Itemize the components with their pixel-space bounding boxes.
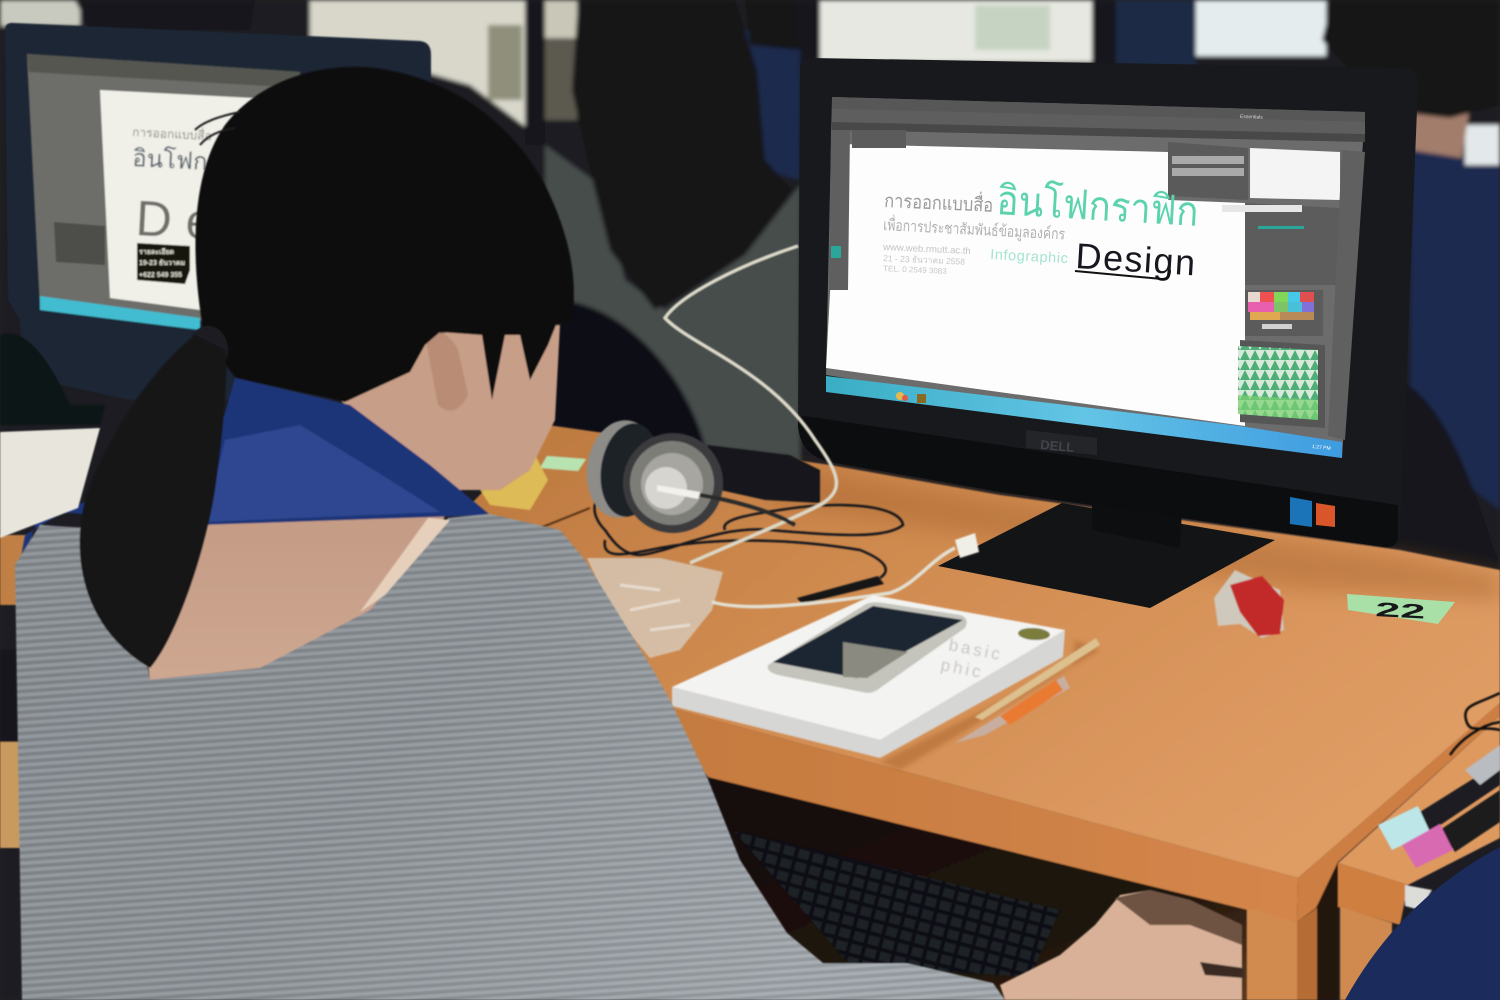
- dell logo: [1026, 430, 1097, 455]
- markers and cable right: [1378, 693, 1500, 868]
- left monitor: [0, 23, 431, 425]
- stray hairs: [195, 112, 240, 145]
- left desk lower: [0, 742, 35, 848]
- second desk top: [1338, 716, 1500, 885]
- left monitor black label: 19-23 ธันวาคม: [139, 259, 185, 267]
- sweater: [15, 514, 1005, 1000]
- intel sticker: [1290, 497, 1312, 527]
- orange sticker: [1316, 503, 1335, 527]
- bra strap: [360, 518, 450, 612]
- book and phone: [672, 595, 1100, 770]
- monitor screen: [826, 97, 1365, 458]
- book title: basic: [947, 635, 1005, 664]
- background screen sliver: [545, 0, 577, 38]
- menu bar: [832, 97, 1365, 122]
- background person top left: [75, 0, 255, 30]
- plastic bag: [587, 558, 723, 658]
- under desk shadow: [708, 777, 1247, 1000]
- headphone plug: [657, 485, 795, 525]
- details line 3: TEL. 0 2549 3083: [883, 264, 947, 276]
- second desk front: [1338, 863, 1408, 925]
- tool colour swatch: [831, 246, 841, 258]
- main monitor: [798, 58, 1418, 608]
- white usb cable: [712, 548, 955, 607]
- monitor post: [1092, 0, 1116, 66]
- label 22: 22: [1375, 599, 1426, 624]
- colour panel: [1245, 203, 1340, 285]
- desk: [0, 425, 1500, 1000]
- centre person sweater: [545, 145, 800, 470]
- essentials label: Essentials: [1240, 114, 1263, 121]
- tooltip: [1222, 205, 1302, 212]
- dell logo: DELL: [1040, 437, 1075, 455]
- taskbar icons: [896, 392, 926, 403]
- monitor body: [798, 58, 1418, 547]
- label 21 on desk: [540, 456, 586, 471]
- phone screen: [773, 606, 963, 678]
- background person navy: [1116, 0, 1196, 66]
- marker silver cap: [1465, 745, 1500, 785]
- background screen top right A: [820, 0, 1092, 62]
- infographic word: Infographic: [990, 247, 1069, 267]
- design underline: [1075, 270, 1170, 279]
- second desk leg: [1340, 907, 1392, 1000]
- gap top right: [800, 0, 820, 70]
- pencil: [975, 638, 1100, 720]
- details line 1: www.web.rmutt.ac.th: [882, 242, 971, 257]
- black cable right: [1450, 693, 1500, 755]
- left monitor text 1: การออกแบบสื่อ: [132, 123, 212, 143]
- navigator panel: [1250, 148, 1340, 200]
- thai title green: อินโฟกราฟิก: [995, 177, 1200, 235]
- book shadow: [880, 640, 1100, 770]
- left monitor canvas: [100, 90, 290, 322]
- headband: [707, 445, 820, 503]
- right person neck: [1405, 105, 1470, 158]
- navy shirt of centre person: [745, 30, 800, 180]
- right person hair: [1322, 0, 1500, 118]
- background screen colour column: [488, 25, 522, 100]
- silver ear cup: [623, 433, 723, 533]
- stand base: [938, 503, 1275, 608]
- thai title: การออกแบบสื่อ: [884, 187, 994, 217]
- left monitor taskbar: [40, 296, 200, 330]
- yellow wrapper: [480, 445, 548, 510]
- left monitor small panel: [54, 222, 105, 265]
- dark gap between desks: [1297, 862, 1338, 1000]
- second desk white tag: [1405, 885, 1432, 910]
- desk shadow under monitor: [760, 470, 1500, 600]
- centre person dark hair behind: [745, 0, 798, 50]
- hand: [1000, 890, 1243, 1000]
- left monitor body: [5, 23, 431, 400]
- left keyboard: [0, 650, 28, 742]
- left monitor text 2: อินโฟก: [132, 144, 208, 176]
- colour bridge greens: [1238, 346, 1318, 420]
- left book: [0, 428, 100, 538]
- background screen centre left: [310, 0, 527, 128]
- background screen top right B: [1196, 0, 1326, 56]
- background screen top left: [0, 0, 80, 26]
- left monitor black label: รายละเอียด: [139, 248, 175, 256]
- neck and face: [340, 325, 560, 490]
- phone reflection: [843, 642, 908, 678]
- swatch panel: [1245, 290, 1323, 336]
- tray text: 1:27 PM: [1312, 444, 1331, 452]
- pen: [955, 676, 1070, 743]
- book badge: [1018, 627, 1050, 641]
- details line 2: 21 - 23 ธันวาคม 2558: [883, 253, 965, 267]
- red paper: [1214, 570, 1284, 638]
- left ear cup: [581, 416, 665, 522]
- skin back: [130, 500, 450, 680]
- foreground navy shoulder: [1345, 847, 1500, 1000]
- left monitor black label: [137, 243, 190, 284]
- character panel: [1168, 142, 1248, 200]
- chair centre: [545, 300, 705, 445]
- desk leg: [1247, 908, 1297, 1000]
- book cover: [672, 595, 1065, 740]
- black cables: [595, 490, 903, 578]
- marker two: [1440, 790, 1500, 852]
- white screen sliver: [1465, 125, 1500, 165]
- right person shirt: [1410, 150, 1500, 510]
- desk surface: [470, 425, 1500, 878]
- stand neck: [1092, 490, 1182, 548]
- blue scarf: [15, 378, 490, 590]
- book side: [672, 630, 1065, 758]
- design word: Design: [1075, 235, 1198, 283]
- label 22: [1347, 594, 1455, 624]
- marker one cap: [1378, 806, 1430, 850]
- desk side edge: [1297, 703, 1500, 922]
- toolbar: [829, 130, 850, 290]
- taskbar: [826, 376, 1342, 458]
- usb plug: [955, 533, 979, 558]
- white cable loop: [665, 246, 836, 563]
- marker two cap: [1402, 824, 1453, 868]
- tabs: [832, 122, 1365, 142]
- colour bridge panel: [1240, 340, 1325, 428]
- desk joint line: [540, 508, 590, 528]
- monitor chin shadow: [798, 415, 1398, 547]
- hair tie: [188, 326, 228, 374]
- headphones and cables: [480, 246, 979, 658]
- desk front edge: [640, 700, 1298, 922]
- colour slider: [1258, 226, 1304, 229]
- woman: [15, 67, 1243, 1000]
- keyboard: [733, 830, 1060, 977]
- right tool strip: [1328, 150, 1365, 440]
- subtitle: เพื่อการประชาสัมพันธ์ข้อมูลองค์กร: [883, 214, 1066, 245]
- hair main: [195, 67, 574, 402]
- left monitor black label: +622 549 355: [139, 272, 182, 279]
- left desk top: [0, 535, 30, 605]
- centre person hair: [572, 0, 792, 310]
- left monitor text 3: D e: [134, 190, 215, 250]
- left monitor screen frame: [27, 54, 300, 330]
- small floating panel: [852, 130, 906, 148]
- option bar: [832, 109, 1365, 134]
- dark monitor edge: [525, 0, 545, 145]
- left monitor menu bar: [27, 54, 300, 88]
- phone body: [768, 602, 967, 693]
- ponytail: [80, 335, 226, 668]
- canvas: [826, 144, 1245, 426]
- headphones left: [0, 333, 105, 425]
- inline remote: [797, 576, 884, 604]
- ear: [425, 332, 468, 411]
- chair right: [1370, 378, 1500, 570]
- book title 2: phic: [939, 655, 985, 682]
- marker one: [1420, 762, 1500, 832]
- desk leg side: [1297, 908, 1317, 1000]
